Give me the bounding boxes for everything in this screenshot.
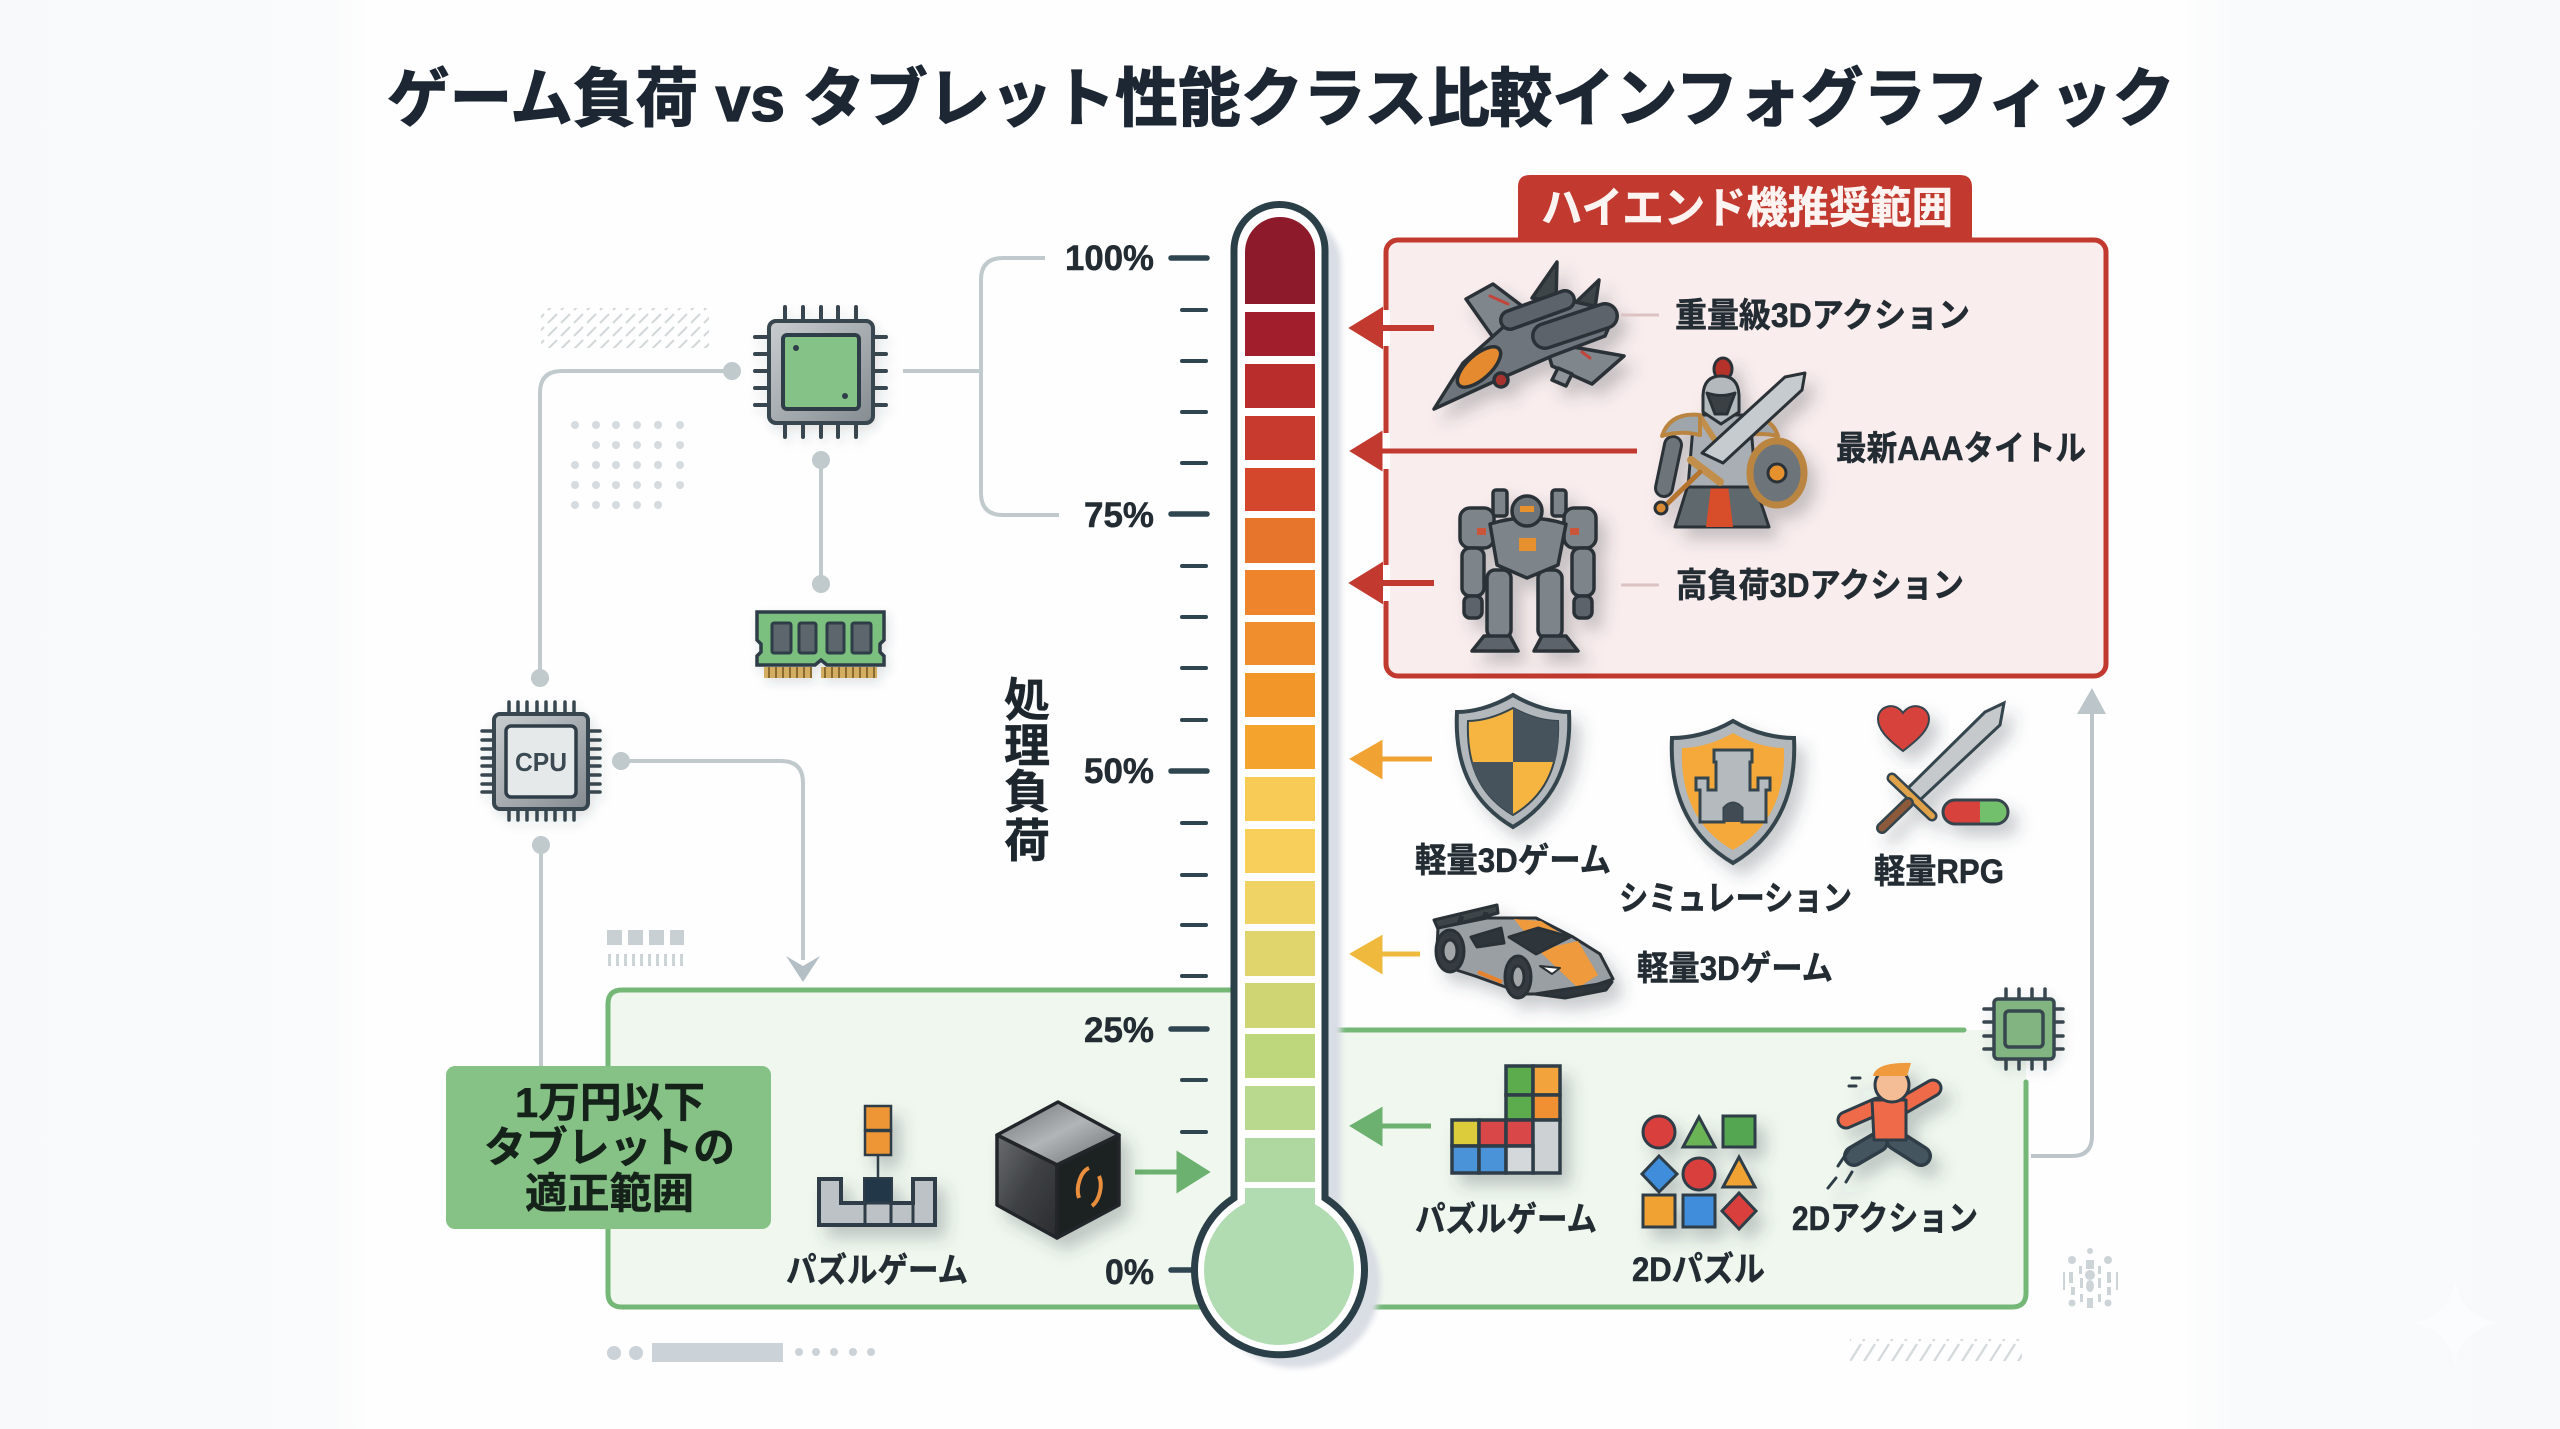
axis labels	[1065, 239, 1154, 1292]
label: 2D action: 2Dアクション	[1792, 1200, 1978, 1238]
decorative dot cluster	[2063, 1248, 2118, 1308]
label: processing load (vertical): 処	[1004, 674, 1050, 726]
connector: chip to ram	[814, 453, 828, 591]
decorative hatch bottom right	[1850, 1339, 2022, 1361]
arrow: cube to thermometer	[1135, 1155, 1206, 1189]
panel: high-end range	[1354, 175, 2106, 676]
label: puzzle game: パズルゲーム	[1415, 1200, 1597, 1239]
label: processing load (vertical): 負	[1004, 766, 1050, 818]
connector: chip bracket to 100% and 75%	[903, 258, 1059, 515]
axis labels: 0%	[1105, 1253, 1154, 1292]
arrow: mid load orange	[1354, 744, 1432, 775]
thermometer	[1194, 204, 1380, 1368]
label: 2D puzzle: 2Dパズル	[1632, 1250, 1765, 1289]
label: simulation: シミュレーション	[1619, 880, 1852, 918]
icon: colored blocks	[1452, 1066, 1560, 1173]
label: newest AAA: 最新AAAタイトル	[1836, 430, 2086, 468]
title: ゲーム負荷 vs タブレット性能クラス比較インフォグラフィック	[387, 63, 2175, 135]
icon: fighter jet	[1434, 262, 1624, 409]
connector: cpu to low-spec panel	[614, 754, 820, 982]
icon: ram module	[757, 612, 884, 678]
thermometer bulb	[1204, 1188, 1354, 1345]
decorative squares and ticks	[607, 930, 685, 966]
icon: CPU chip	[482, 702, 600, 820]
label: processing load (vertical): 理	[1004, 720, 1050, 772]
axis tick marks	[1171, 258, 1207, 1270]
range tab: ハイエンド機推奨範囲	[1541, 185, 1953, 233]
icon: sword and gauge	[1882, 703, 2008, 828]
arrow: low load green	[1354, 1111, 1431, 1142]
axis labels: 100%	[1065, 239, 1154, 278]
chip label: CPU	[515, 747, 567, 777]
label: processing load (vertical): 荷	[1004, 815, 1050, 867]
arrow: AAA	[1354, 435, 1637, 467]
label: puzzle game left: パズルゲーム	[786, 1251, 968, 1290]
arrow: high load action	[1354, 567, 1434, 599]
watermark sparkle	[2412, 1280, 2498, 1366]
icon: knight	[1655, 358, 1805, 527]
icon: small green chip	[1984, 989, 2063, 1069]
icon: mech robot	[1460, 490, 1596, 651]
connector: panel up to high-end range	[2031, 688, 2106, 1156]
label: light RPG: 軽量RPG	[1874, 853, 2004, 891]
label: light 3D game: 軽量3Dゲーム	[1415, 842, 1611, 880]
decorative progress bar	[607, 1343, 875, 1362]
icon: sports car	[1434, 905, 1613, 998]
icon: dark cube	[997, 1102, 1119, 1238]
connector: chip to cpu	[533, 364, 739, 685]
decorative dot grid	[571, 421, 684, 509]
icon: heart	[1878, 706, 1929, 751]
axis labels: 25%	[1084, 1011, 1154, 1050]
label: light 3D game 2: 軽量3Dゲーム	[1637, 950, 1833, 988]
icon: colored shapes	[1642, 1116, 1756, 1229]
label: under 10,000 yen tablet range	[446, 1066, 771, 1229]
panel: green low-spec range	[608, 990, 2026, 1307]
label: high load 3D action: 高負荷3Dアクション	[1676, 567, 1964, 605]
label: under 10,000 yen tablet range: 1万円以下	[515, 1079, 705, 1126]
icon: running person	[1828, 1063, 1933, 1188]
range tab	[1518, 175, 1972, 240]
icon: green chip	[755, 307, 886, 437]
axis labels: 75%	[1084, 496, 1154, 535]
label: heavy 3D action: 重量級3Dアクション	[1675, 297, 1970, 335]
icon: falling block game	[819, 1106, 935, 1225]
arrow: low-mid load yellow	[1354, 939, 1420, 970]
label: under 10,000 yen tablet range: タブレットの	[484, 1124, 735, 1171]
axis labels: 50%	[1084, 752, 1154, 791]
decorative hatch top left	[541, 308, 709, 348]
icon: castle shield	[1672, 721, 1794, 863]
connector: cpu down to label	[534, 838, 548, 1066]
label: under 10,000 yen tablet range: 適正範囲	[525, 1170, 694, 1217]
arrow: heavy action	[1354, 312, 1434, 344]
icon: checkered shield	[1457, 695, 1569, 827]
thermometer scale segments	[1245, 217, 1315, 1182]
